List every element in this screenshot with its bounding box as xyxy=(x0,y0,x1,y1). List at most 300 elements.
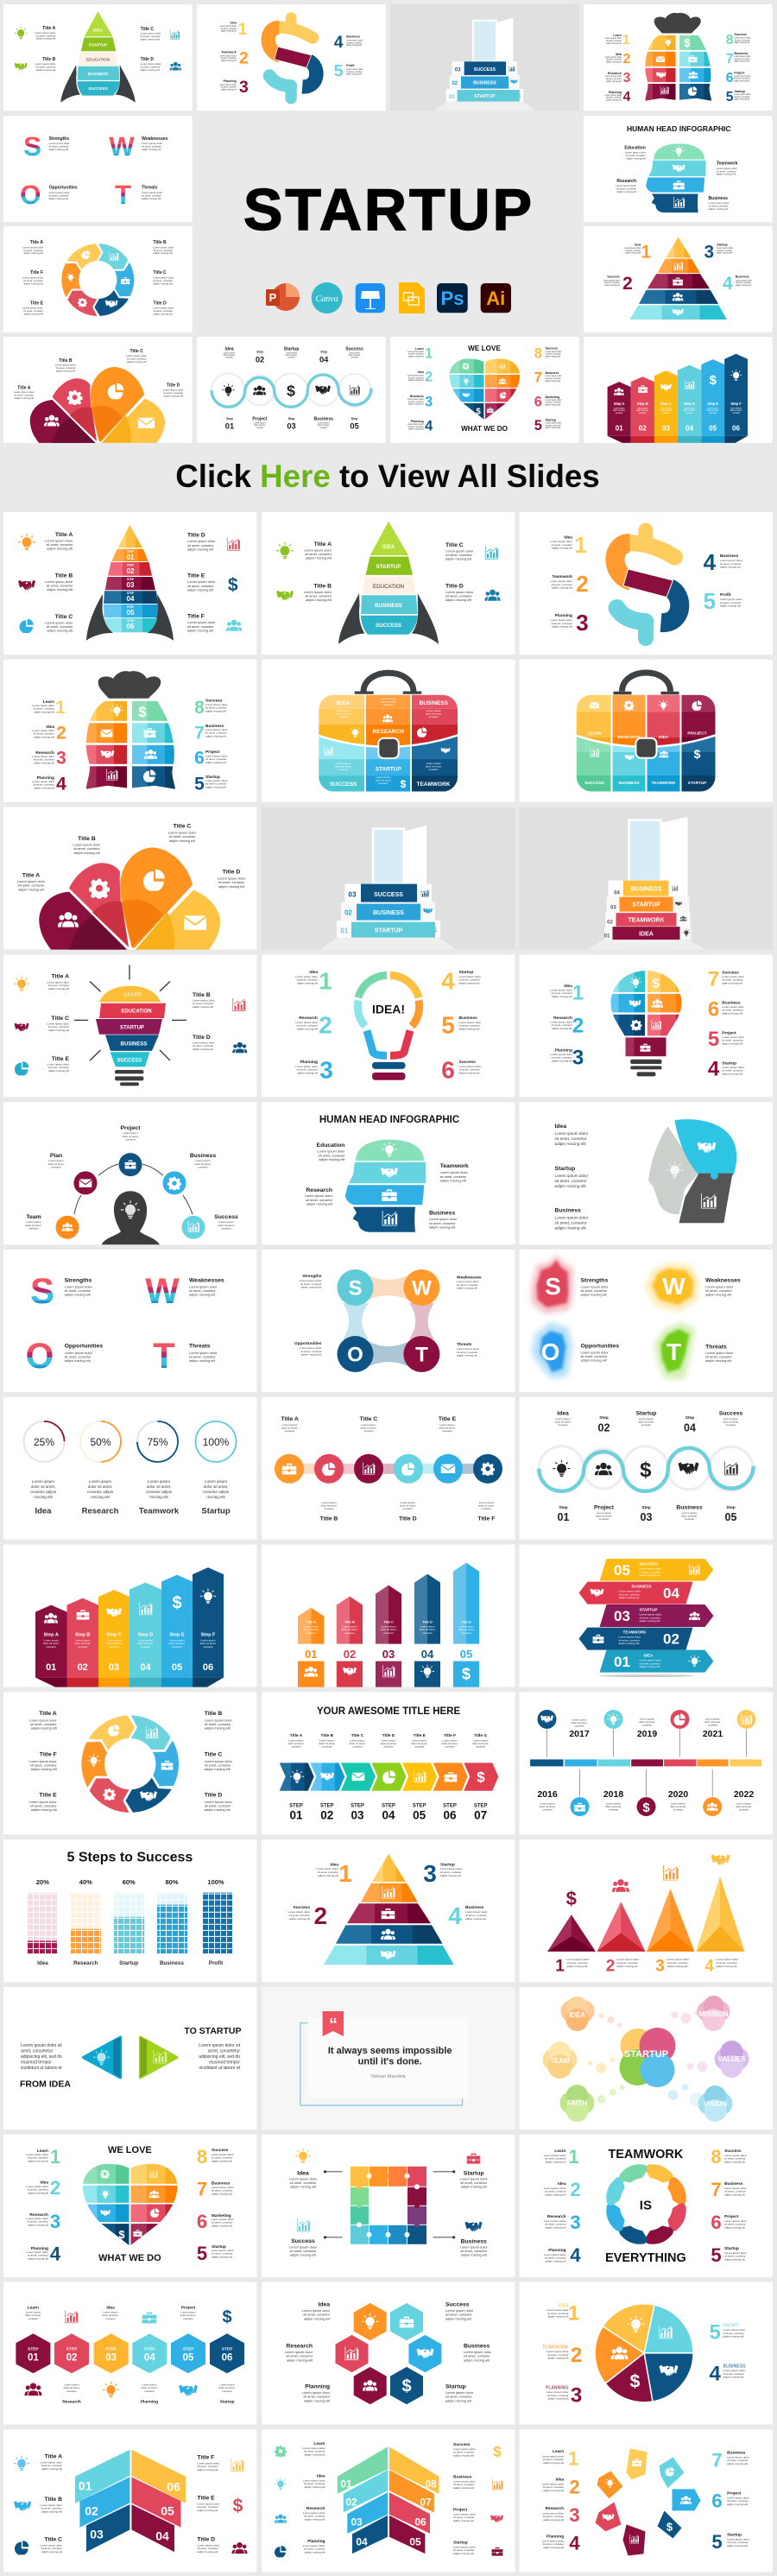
labels: Title A xyxy=(22,873,40,879)
ring icons xyxy=(87,1725,173,1801)
labels and numbers: Project xyxy=(205,750,220,755)
panel: pyramid xyxy=(262,1839,515,1982)
labels and numbers: Project xyxy=(724,2214,739,2219)
labels: Threats xyxy=(189,1344,211,1350)
body text: Lorem ipsum dolor sit xyxy=(21,2043,62,2048)
labels: Startup xyxy=(464,2171,484,2177)
labels: 04 xyxy=(684,1421,696,1434)
labels and numbers: Learn xyxy=(37,2149,48,2154)
labels xyxy=(285,2302,492,2402)
labels and numbers: TEAMWORK xyxy=(542,2345,569,2351)
labels: Title E xyxy=(439,1416,457,1422)
bubble labels: VALUES xyxy=(718,2055,746,2063)
labels and numbers: BUSINESS xyxy=(723,2364,746,2370)
timeline bar xyxy=(530,1759,761,1766)
chevron numbers: 06 xyxy=(414,2516,426,2528)
letters: S xyxy=(30,1270,54,1311)
bulb layers: BUSINESS xyxy=(121,1041,147,1047)
briefcase body xyxy=(319,694,458,791)
splash letters: T xyxy=(666,1339,681,1365)
doorway xyxy=(373,826,426,887)
descriptions: rnscing elit xyxy=(149,1495,169,1499)
icon tiles xyxy=(298,1661,479,1687)
panel: SWOT circles xyxy=(262,1250,515,1392)
labels and numbers: 2 xyxy=(50,2177,60,2199)
panel: money bag xyxy=(3,660,257,802)
top panel: heart thumbnail xyxy=(390,337,579,443)
briefcase handle xyxy=(613,673,679,694)
ring names xyxy=(35,1506,231,1516)
top panel: human head thumbnail xyxy=(584,116,773,222)
column titles: Title D xyxy=(382,1733,395,1738)
labels: Success xyxy=(214,1214,238,1220)
orbit circles xyxy=(55,1153,205,1239)
labels: Project xyxy=(594,1504,615,1510)
briefcase icons xyxy=(590,700,702,761)
panel: SWOT mosaic letters xyxy=(3,1250,257,1392)
arrows xyxy=(298,1563,479,1644)
labels and numbers: 5 xyxy=(197,2243,207,2264)
labels: Threats xyxy=(457,1342,472,1347)
labels: Step xyxy=(559,1505,568,1510)
labels and numbers: Profit xyxy=(720,592,731,598)
years: 2017 xyxy=(569,1729,590,1739)
headings: TEAMWORK xyxy=(608,2148,684,2161)
percent labels: 40% xyxy=(79,1878,92,1886)
column titles: Title C xyxy=(351,1733,364,1738)
labels and numbers xyxy=(32,698,228,794)
labels: Idea xyxy=(317,2474,325,2479)
labels and numbers: Idea xyxy=(558,2181,566,2187)
icons: $ xyxy=(493,2443,502,2459)
body text: Lorem ipsum dolor sit xyxy=(199,2043,241,2048)
years xyxy=(537,1729,754,1800)
labels: titles and descriptions xyxy=(304,541,474,602)
quote text: until it's done. xyxy=(358,2057,422,2067)
panel: IDEA outline bulb xyxy=(262,954,515,1097)
labels: Title C xyxy=(360,1416,377,1422)
panel: ribbon steps xyxy=(520,1545,773,1687)
labels and numbers xyxy=(287,1860,488,1929)
bubble labels xyxy=(550,2010,746,2108)
icon: PowerPoint: P xyxy=(269,291,277,304)
labels and numbers: Research xyxy=(29,2212,48,2218)
labels: Title C xyxy=(51,1016,69,1022)
panel: heart grid xyxy=(3,2135,257,2277)
labels and numbers: 3 xyxy=(569,2504,580,2526)
labels and numbers: 1 xyxy=(568,2302,579,2326)
rocket diagram: 03 xyxy=(127,581,135,589)
labels xyxy=(65,1278,224,1363)
bulb grid xyxy=(611,971,682,1057)
percentages xyxy=(34,1436,230,1448)
bubble labels: TEAM xyxy=(550,2057,570,2065)
labels and numbers: Planning xyxy=(31,2246,48,2251)
briefcase text: LEARN xyxy=(587,731,602,735)
labels and numbers: PLANNING xyxy=(546,2386,568,2391)
rocket diagram: EDUCATION xyxy=(373,584,404,590)
icons xyxy=(295,2149,482,2231)
call to action heading: Click Here to View All Slides xyxy=(175,459,600,494)
bulb icons xyxy=(629,976,663,1052)
step numbers: 04 xyxy=(382,1808,395,1821)
icons above triangles xyxy=(566,1854,730,1909)
descriptions: dolor sit amet, xyxy=(88,1484,112,1489)
connectors xyxy=(301,1464,477,1474)
panel: growing arrows xyxy=(262,1545,515,1687)
descriptions: rnscing elit xyxy=(206,1495,226,1499)
staircase: IDEA xyxy=(639,932,654,938)
labels: titles and descriptions: Title D xyxy=(445,584,464,590)
arrow text: Title D xyxy=(422,1621,433,1624)
labels and numbers: Startup xyxy=(205,775,220,780)
bubble labels: VISION xyxy=(704,2100,727,2108)
briefcase clasp xyxy=(635,738,656,758)
panel: arrow bars xyxy=(3,1545,257,1687)
software icons row xyxy=(266,282,511,313)
labels and numbers: Idea xyxy=(564,984,572,989)
step numbers xyxy=(289,1803,488,1821)
bar text: Step E xyxy=(169,1633,185,1638)
briefcase clasp xyxy=(378,738,399,758)
icon: Canva xyxy=(312,282,343,313)
headings: WE LOVE xyxy=(108,2145,152,2155)
bar text: 03 xyxy=(109,1662,119,1673)
icon: Canva: Canva xyxy=(316,294,338,304)
labels and numbers: 6 xyxy=(197,2211,207,2232)
labels and numbers: Business xyxy=(205,724,224,729)
body text: eiusmod tempor xyxy=(209,2060,240,2066)
briefcase text: SUCCESS xyxy=(584,781,604,785)
milestone circles xyxy=(537,1710,756,1816)
bottom labels xyxy=(24,2382,236,2404)
bar text: Step D xyxy=(138,1633,153,1638)
labels and numbers: Success xyxy=(205,698,223,703)
top panel: SWOT thumbnail xyxy=(3,116,193,222)
labels: Strengths xyxy=(65,1278,92,1284)
labels: Title B xyxy=(44,2497,62,2503)
column titles xyxy=(288,1733,489,1749)
labels: Title B xyxy=(205,1711,222,1717)
labels: Planning xyxy=(307,2539,325,2544)
step numbers: STEP xyxy=(382,1803,395,1808)
labels and numbers: 3 xyxy=(56,748,66,768)
labels and numbers: 1 xyxy=(319,967,332,994)
labels and numbers: Planning xyxy=(37,775,54,781)
icons xyxy=(276,542,501,601)
top panel: pyramid thumbnail xyxy=(584,226,773,332)
labels: Education xyxy=(317,1142,344,1149)
labels and numbers: Planning xyxy=(548,2248,566,2253)
icons above triangles: $ xyxy=(566,1888,577,1909)
ribbon text: STARTUP xyxy=(639,1608,657,1612)
labels and numbers: Startup xyxy=(459,970,473,975)
column names: Research xyxy=(73,1960,98,1966)
panel: hexagon ring xyxy=(262,2282,515,2425)
labels: Team xyxy=(26,1214,41,1220)
top panel: arrow bars thumbnail xyxy=(584,337,773,443)
labels: Success xyxy=(719,1411,743,1417)
labels and numbers: Research xyxy=(547,2214,566,2219)
column titles: Title B xyxy=(321,1733,334,1738)
labels xyxy=(294,1274,482,1358)
labels and numbers: Startup xyxy=(727,2532,742,2537)
briefcase text: STARTUP xyxy=(688,781,706,785)
labels: Learn xyxy=(313,2441,325,2446)
staircase xyxy=(337,884,440,938)
body text: eiusmod tempor xyxy=(21,2060,52,2066)
labels and numbers: 4 xyxy=(441,967,455,994)
labels and numbers: Marketing xyxy=(212,2213,231,2218)
body text: adipiscing elit, sed do xyxy=(199,2054,240,2060)
labels and numbers: 4 xyxy=(710,2363,722,2386)
labels: Idea xyxy=(318,2302,330,2308)
hexagons: 01 xyxy=(28,2353,39,2364)
labels: Startup xyxy=(453,2540,468,2545)
labels: Title D xyxy=(205,1793,222,1799)
labels: Teamwork xyxy=(440,1163,469,1169)
arrow text: Title C xyxy=(383,1621,394,1624)
quote text: It always seems impossible xyxy=(328,2046,452,2056)
waffle columns xyxy=(28,1893,232,1953)
panel: timeline xyxy=(520,1692,773,1834)
column titles: Title E xyxy=(414,1733,426,1738)
hexagons: 04 xyxy=(144,2353,155,2364)
numbers: 02 xyxy=(344,1648,356,1661)
top panel: money bag thumbnail xyxy=(584,4,773,111)
labels and numbers: 3 xyxy=(571,2384,582,2408)
floor xyxy=(320,938,457,950)
labels: Weaknesses xyxy=(705,1278,741,1284)
chevrons xyxy=(338,2446,439,2554)
labels: Step xyxy=(641,1505,651,1510)
labels and numbers: 6 xyxy=(711,2212,722,2233)
top panel: cycle ring thumbnail xyxy=(3,226,193,332)
briefcase text xyxy=(584,731,707,785)
labels xyxy=(554,1123,589,1230)
descriptions: Lorem ipsum xyxy=(205,1479,227,1484)
numbers: 01 xyxy=(305,1648,317,1661)
briefcase text: TEAMWORK xyxy=(651,781,676,785)
labels and numbers: 2 xyxy=(572,1014,584,1037)
labels and numbers: Business xyxy=(212,2181,231,2187)
top panel: petals thumbnail xyxy=(3,337,193,443)
chevron numbers: 01 xyxy=(340,2478,352,2490)
percent labels xyxy=(36,1878,224,1886)
labels xyxy=(303,2441,476,2555)
labels and numbers: Teamwork xyxy=(553,574,572,579)
panel: five steps to success xyxy=(3,1839,257,1982)
percent labels: 20% xyxy=(36,1878,49,1886)
labels: Title A xyxy=(39,1711,57,1717)
rocket diagram: STARTUP xyxy=(376,564,401,570)
icon: Photoshop: Ps xyxy=(441,288,464,309)
percentages: 100% xyxy=(203,1436,230,1448)
hexagons: 02 xyxy=(66,2353,77,2364)
hexagons: STEP xyxy=(28,2347,39,2352)
years: 2018 xyxy=(603,1789,623,1800)
headings xyxy=(98,2145,161,2263)
labels and numbers: 5 xyxy=(711,2244,722,2266)
labels and numbers: Learn xyxy=(553,2449,564,2454)
panel: human head infographic xyxy=(262,1102,515,1244)
labels and numbers xyxy=(542,2447,749,2554)
briefcase text: SUCCESS xyxy=(330,782,357,788)
labels: titles and descriptions: Title E xyxy=(187,573,205,579)
labels and numbers: Planning xyxy=(555,1047,572,1053)
body text: incididunt ut labore et xyxy=(199,2066,241,2071)
descriptions: dolor sit amet, xyxy=(147,1484,171,1489)
labels: Step xyxy=(599,1415,609,1421)
labels xyxy=(580,1278,741,1363)
letters xyxy=(26,1270,180,1376)
panel: seven chevron steps xyxy=(262,1692,515,1834)
labels xyxy=(555,1411,743,1523)
staircase: 01 xyxy=(341,927,349,935)
labels and numbers: Research xyxy=(553,1016,572,1021)
head puzzle xyxy=(648,1119,736,1223)
labels and numbers xyxy=(550,967,744,1080)
labels: Title D xyxy=(197,2537,215,2543)
headings: IS xyxy=(640,2199,652,2213)
labels and numbers: 3 xyxy=(50,2211,60,2232)
heart icons xyxy=(100,2169,160,2241)
body text: incididunt ut labore et xyxy=(21,2066,62,2071)
rocket diagram xyxy=(338,522,439,644)
labels: titles and descriptions: Title D xyxy=(187,533,205,539)
labels and numbers: Success xyxy=(294,1905,310,1910)
staircase: 01 xyxy=(604,934,610,940)
ribbon text: SUCCESS xyxy=(639,1562,658,1566)
labels and numbers: Project xyxy=(727,2491,742,2496)
top labels: Idea xyxy=(106,2306,115,2311)
icons xyxy=(14,2456,247,2555)
chevron numbers: 03 xyxy=(351,2516,363,2528)
hexagons xyxy=(335,2303,441,2404)
descriptions: Lorem ipsum xyxy=(148,1479,170,1484)
quote bookmark: “ xyxy=(329,2016,338,2035)
labels xyxy=(26,1125,238,1230)
labels and numbers: 7 xyxy=(711,2449,723,2471)
chevrons xyxy=(75,2450,186,2552)
chevron numbers: 05 xyxy=(161,2503,174,2517)
labels and numbers xyxy=(550,532,742,636)
chevron numbers: 07 xyxy=(420,2496,432,2508)
briefcase text: STARTUP xyxy=(376,766,401,772)
labels and numbers: Idea xyxy=(330,1863,338,1868)
labels and numbers xyxy=(544,2146,747,2266)
labels: Step xyxy=(726,1505,736,1510)
letters: O xyxy=(26,1335,54,1376)
labels: Weaknesses xyxy=(189,1278,224,1284)
chevron numbers: 04 xyxy=(155,2529,169,2542)
headings: WHAT WE DO xyxy=(98,2253,161,2263)
bulb layers: LEARN xyxy=(124,992,142,997)
labels: Title B xyxy=(193,992,211,998)
percentages: 75% xyxy=(147,1436,168,1448)
rocket diagram: 02 xyxy=(127,567,135,575)
labels: Business xyxy=(429,1211,455,1217)
small dots xyxy=(587,2010,708,2106)
labels and numbers: Planning xyxy=(555,613,572,618)
labels and numbers: 5 xyxy=(711,2531,723,2553)
pale splash halos xyxy=(532,1255,699,1379)
percent labels: 60% xyxy=(123,1878,136,1886)
labels: Idea xyxy=(554,1123,566,1130)
labels: Title F xyxy=(477,1516,495,1522)
white card xyxy=(307,2017,469,2098)
arrow text: Title A xyxy=(306,1621,316,1624)
step numbers: 05 xyxy=(413,1808,426,1821)
panel: six step rocket xyxy=(3,512,257,655)
descriptions: dolor sit amet, xyxy=(204,1484,228,1489)
chevron numbers xyxy=(79,2478,180,2542)
labels and numbers: Startup xyxy=(724,2246,739,2251)
labels: Opportunities xyxy=(580,1344,619,1350)
descriptions: consetur adipin xyxy=(146,1490,173,1494)
panel: door stairs four steps xyxy=(520,807,773,950)
labels and numbers: IDEA xyxy=(558,2304,569,2309)
labels and numbers: 1 xyxy=(338,1860,352,1887)
briefcase text: IDEA xyxy=(337,700,351,706)
staircase: STARTUP xyxy=(375,928,403,934)
splash letters: S xyxy=(545,1273,561,1300)
labels xyxy=(17,824,246,891)
labels: Title F xyxy=(197,2455,214,2461)
hexagons: 06 xyxy=(222,2353,232,2364)
circles with icons xyxy=(275,1454,502,1484)
panel: colored grid bulb xyxy=(520,954,773,1097)
panel: puzzle head xyxy=(520,1102,773,1244)
labels: Title E xyxy=(39,1793,57,1799)
quote author: Nelson Mandela xyxy=(371,2074,407,2079)
rocket diagram: 06 xyxy=(127,623,135,630)
labels: titles and descriptions: Title B xyxy=(55,573,73,579)
labels: titles and descriptions: Title A xyxy=(55,532,73,538)
milestone circles: $ xyxy=(642,1801,650,1815)
labels and numbers: 1 xyxy=(55,698,66,718)
column titles: Title A xyxy=(290,1733,303,1738)
labels: Title E xyxy=(197,2495,215,2501)
labels: Startup xyxy=(445,2384,466,2390)
descriptions: consetur adipin xyxy=(203,1490,230,1494)
bubble labels: FAITH xyxy=(567,2099,587,2107)
staircase: TEAMWORK xyxy=(629,918,665,924)
central overlapping bubbles xyxy=(620,2028,675,2087)
years: 2021 xyxy=(703,1729,723,1739)
labels: Step xyxy=(685,1415,694,1421)
labels and numbers: Idea xyxy=(40,2180,48,2186)
briefcase icons xyxy=(324,715,451,790)
labels: Strengths xyxy=(302,1274,322,1279)
labels: titles and descriptions: Title C xyxy=(55,614,73,620)
letters: T xyxy=(153,1335,175,1376)
labels: titles and descriptions: Title C xyxy=(445,542,464,548)
labels and numbers: 5 xyxy=(441,1011,455,1038)
labels: Strengths xyxy=(580,1278,608,1284)
labels and numbers: PROFIT xyxy=(723,2324,740,2329)
icon: Illustrator: Ai xyxy=(486,288,505,309)
chevron numbers: 06 xyxy=(167,2479,180,2493)
bag icons xyxy=(100,704,157,782)
bulb icons: $ xyxy=(652,976,660,991)
panel: teamwork is everything xyxy=(520,2135,773,2277)
wave icons xyxy=(553,1459,738,1482)
top panel: wave steps thumbnail xyxy=(197,337,386,443)
descriptions: Lorem ipsum xyxy=(32,1479,54,1484)
labels and numbers: 6 xyxy=(711,2490,723,2511)
ring names: Teamwork xyxy=(139,1506,180,1516)
